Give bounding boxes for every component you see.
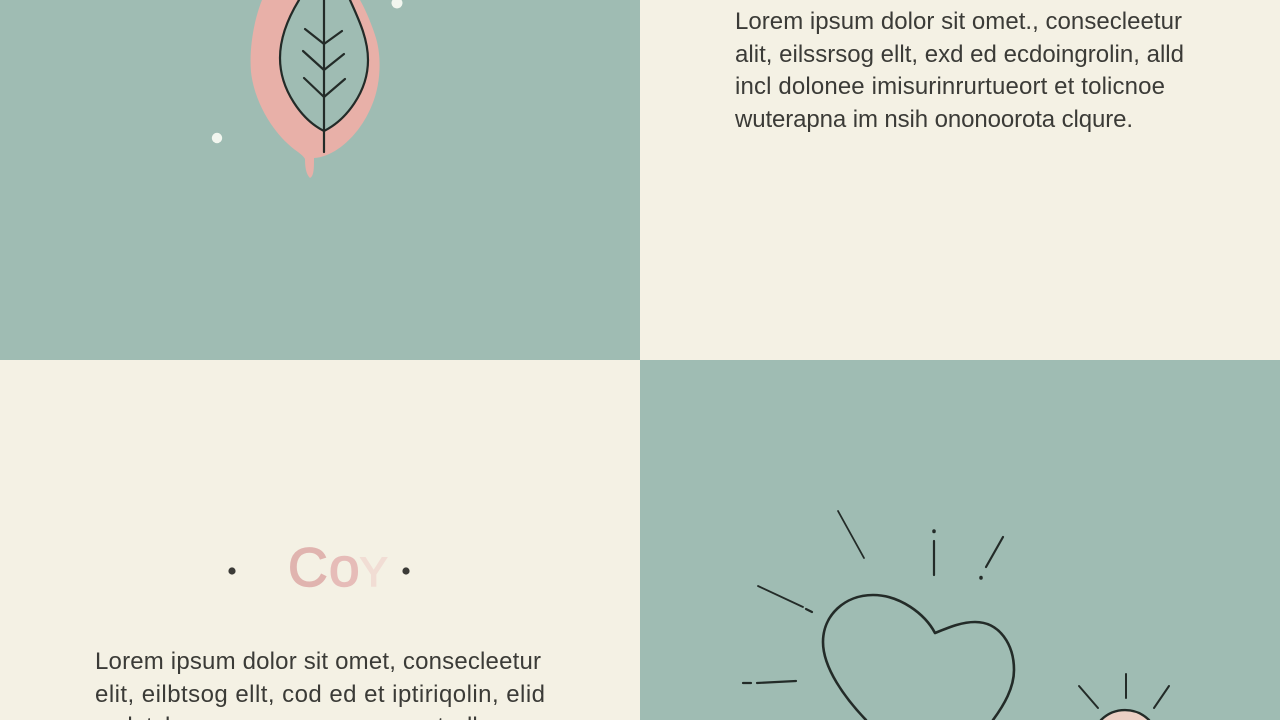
text block: bottom left paragraph: Lorem ipsum dolor sit omet, consecleetur [95, 648, 541, 675]
heading: Coy with dots: o [329, 536, 360, 598]
leaf outline [280, 0, 368, 131]
white dots [212, 0, 402, 143]
panel: bottom left cream heading and text [0, 360, 640, 720]
heading: Coy with dots: Y [360, 549, 387, 595]
text block: top right paragraph: Lorem ipsum dolor sit omet., consecleetur [735, 8, 1182, 35]
heading: Coy with dots: C [288, 536, 328, 598]
panel: top right cream text [640, 0, 1280, 360]
heading: Coy with dots [228, 536, 410, 598]
text block: top right paragraph: incl dolonee imisurinrurtueort et tolicnoe [735, 73, 1165, 100]
text block: top right paragraph: wuterapna im nsih ononoorota clqure. [734, 106, 1133, 133]
heart outline [823, 595, 1014, 720]
text block: bottom left paragraph [95, 648, 545, 708]
panel: top left teal with leaf [0, 0, 640, 360]
icon: small circle with rays [1079, 674, 1169, 720]
icon: leaf [212, 0, 402, 178]
heart rays [743, 511, 1003, 683]
text block: top right paragraph [734, 8, 1184, 133]
leaf pink backdrop [251, 0, 380, 178]
icon: heart with rays [743, 511, 1014, 720]
leaf stem and veins [303, 0, 345, 152]
panel: bottom right teal with hearts [640, 360, 1280, 720]
text block: bottom left paragraph: elit, eilbtsog ellt, cod ed et iptiriqolin, elid [95, 681, 545, 708]
text block: top right paragraph: alit, eilssrsog ellt, exd ed ecdoingrolin, alld [735, 41, 1184, 68]
